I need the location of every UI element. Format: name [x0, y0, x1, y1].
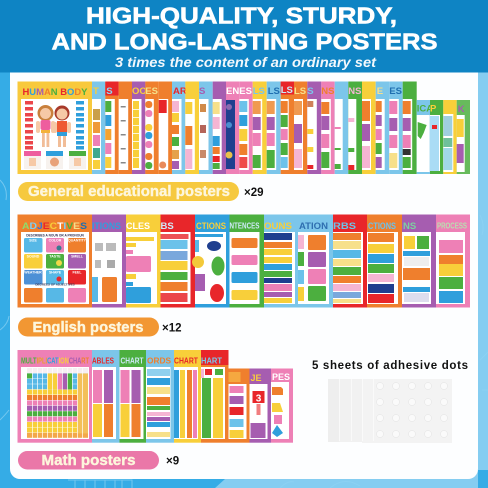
poster: multiplication chart	[18, 350, 92, 443]
poster: nouns plural: NS	[403, 221, 416, 232]
poster: nouns plural	[402, 214, 436, 308]
poster: chart green	[120, 350, 146, 443]
poster: chart red	[201, 350, 228, 443]
poster: adjectives: SMELL	[71, 254, 84, 258]
label: general educational posters: General educational posters	[28, 184, 230, 200]
posters strip 17	[307, 82, 321, 174]
poster: articles: CLES	[126, 221, 150, 231]
posters strip 17: S	[307, 86, 314, 97]
poster: lower strip 3	[443, 100, 457, 174]
poster: verbs: BS	[160, 221, 174, 232]
posters strip 2	[105, 82, 119, 174]
posters strip 8	[185, 82, 199, 174]
poster: lower math 1	[228, 368, 250, 443]
poster: human body: HUMAN BODY	[22, 87, 88, 97]
poster: adjectives: ADJECTIVES	[22, 221, 87, 232]
poster: punctuation: ATION	[299, 221, 328, 231]
count x12: ×12	[162, 322, 182, 334]
posters strip 12: ES	[239, 86, 252, 97]
posters strip 16	[294, 82, 307, 174]
poster: tables blue	[92, 350, 120, 443]
poster group: english posters	[18, 214, 470, 308]
poster: adjectives: TASTE	[49, 254, 61, 258]
posters strip 18: NS	[321, 86, 335, 97]
poster: lower strip 4	[457, 100, 470, 174]
poster: sentences: NTENCES	[230, 222, 260, 230]
count x9: ×9	[166, 456, 179, 468]
poster: lower strip 1	[417, 100, 433, 174]
poster: adjectives: SHAPE	[49, 270, 62, 274]
poster: adjectives: WEATHER	[24, 270, 42, 274]
white panel	[10, 72, 478, 479]
posters strip 14: LS	[268, 86, 280, 97]
poster: words: ORDS	[147, 356, 171, 366]
posters strip 23	[389, 82, 403, 174]
poster: chart yellow: CHART	[174, 356, 199, 366]
poster: adjectives: SOUND	[27, 254, 40, 258]
poster: adjectives: DEGREES OF ADJECTIVES	[35, 282, 75, 286]
subtitle: 3 times the content of an ordinary set	[115, 54, 377, 70]
posters strip 5: ES	[145, 86, 158, 97]
poster: adjectives: FEEL	[73, 270, 82, 274]
poster: adjectives: SIZE	[29, 238, 38, 242]
title: AND LONG-LASTING POSTERS	[52, 28, 438, 54]
label: math posters	[18, 451, 159, 470]
poster: lower strip 2	[430, 100, 443, 174]
posters strip 3	[119, 82, 132, 174]
icon: girl	[36, 105, 55, 147]
poster: articles	[126, 214, 160, 308]
dots	[376, 382, 448, 438]
three body cards	[24, 151, 86, 169]
posters strip 24	[403, 82, 417, 174]
poster: adjectives: QUANTITY	[68, 238, 87, 242]
poster: chart red: HART	[201, 356, 223, 366]
poster: adjectives: COLOR	[49, 238, 62, 242]
body labels right	[76, 101, 84, 150]
posters strip 15	[281, 82, 294, 174]
poster: shapes	[271, 368, 293, 443]
posters strip 10	[213, 82, 226, 174]
times table grid	[27, 367, 88, 438]
poster: adjectives: DESCRIBES A NOUN OR A PRONOUN	[26, 234, 84, 238]
posters strip 7: AR	[173, 86, 187, 97]
posters strip 1: T	[93, 86, 99, 97]
poster: chart green: CHART	[120, 356, 144, 366]
poster: lower strip 2: P	[430, 104, 437, 114]
posters strip 1	[92, 82, 105, 174]
poster group: math posters	[18, 350, 293, 443]
poster: adjectives	[18, 214, 92, 308]
poster: shapes: PES	[272, 372, 290, 382]
poster: conjunctions	[367, 214, 402, 308]
posters strip 11	[226, 82, 239, 174]
posters strip 4	[132, 82, 147, 174]
posters strip 2: S	[106, 86, 113, 97]
adhesive dot sheets	[328, 379, 452, 443]
posters strip 18	[321, 82, 335, 174]
label: math posters: Math posters	[42, 453, 136, 469]
posters strip 20	[348, 82, 362, 174]
poster: lower math 2: JE	[250, 373, 262, 383]
poster: chart yellow	[174, 350, 201, 443]
label: english posters	[18, 318, 159, 336]
poster: sentence functions	[192, 214, 230, 308]
posters strip 9: S	[199, 86, 205, 97]
poster: prepositions: ITIONS	[92, 221, 121, 231]
posters strip 14	[267, 82, 281, 174]
poster: punctuation	[298, 214, 333, 308]
posters strip 21	[362, 82, 376, 174]
poster group: general educational posters	[18, 82, 470, 174]
poster: tables blue: ABLES	[92, 356, 114, 366]
posters strip 11: EN	[226, 86, 239, 97]
poster: writing process	[436, 214, 470, 308]
poster: lower math 2: 3	[256, 394, 262, 404]
label: english posters: English posters	[32, 320, 144, 336]
poster: sentence functions: CTIONS	[196, 221, 226, 231]
posters strip 6	[159, 82, 172, 174]
posters strip 12	[239, 82, 253, 174]
poster: adverbs: RBS	[333, 221, 356, 232]
posters strip 5	[145, 82, 159, 174]
title: HIGH-QUALITY, STURDY,	[86, 2, 397, 28]
poster: human body	[18, 82, 92, 174]
poster: verbs	[160, 214, 195, 308]
posters strip 19	[335, 82, 348, 174]
count x29: ×29	[244, 187, 264, 199]
poster: lower math 2	[250, 368, 271, 443]
posters strip 23: ES	[389, 86, 402, 97]
body labels left	[25, 101, 33, 150]
posters strip 20: NS	[348, 86, 362, 97]
icon: boy	[53, 106, 71, 147]
posters strip 4: OO	[132, 86, 147, 97]
poster: lower strip 1: ICA	[417, 104, 433, 114]
poster: adverbs	[333, 214, 367, 308]
poster: prepositions	[92, 214, 126, 308]
poster: sentences	[230, 214, 264, 308]
poster: lower strip 4: K	[458, 104, 465, 115]
poster: conjunctions: CTIONS	[368, 221, 396, 231]
posters strip 13: LS	[253, 86, 265, 97]
poster: writing process: PROCESS	[437, 222, 468, 230]
poster: words	[146, 350, 174, 443]
posters strip 22: E	[377, 86, 383, 97]
posters strip 9	[199, 82, 213, 174]
posters strip 16: LS	[294, 86, 306, 97]
posters strip 13	[253, 82, 267, 174]
poster: multiplication chart: MULTIPLICATIONCHART	[21, 356, 90, 366]
posters strip 22	[376, 82, 389, 174]
header band	[0, 0, 488, 72]
posters strip 7	[172, 82, 187, 174]
poster: nouns	[264, 214, 298, 308]
title	[52, 2, 438, 54]
poster: nouns: OUNS	[264, 221, 292, 232]
heading: adhesive dots: 5 sheets of adhesive dots	[312, 360, 468, 372]
posters strip 15: LS	[281, 85, 293, 96]
